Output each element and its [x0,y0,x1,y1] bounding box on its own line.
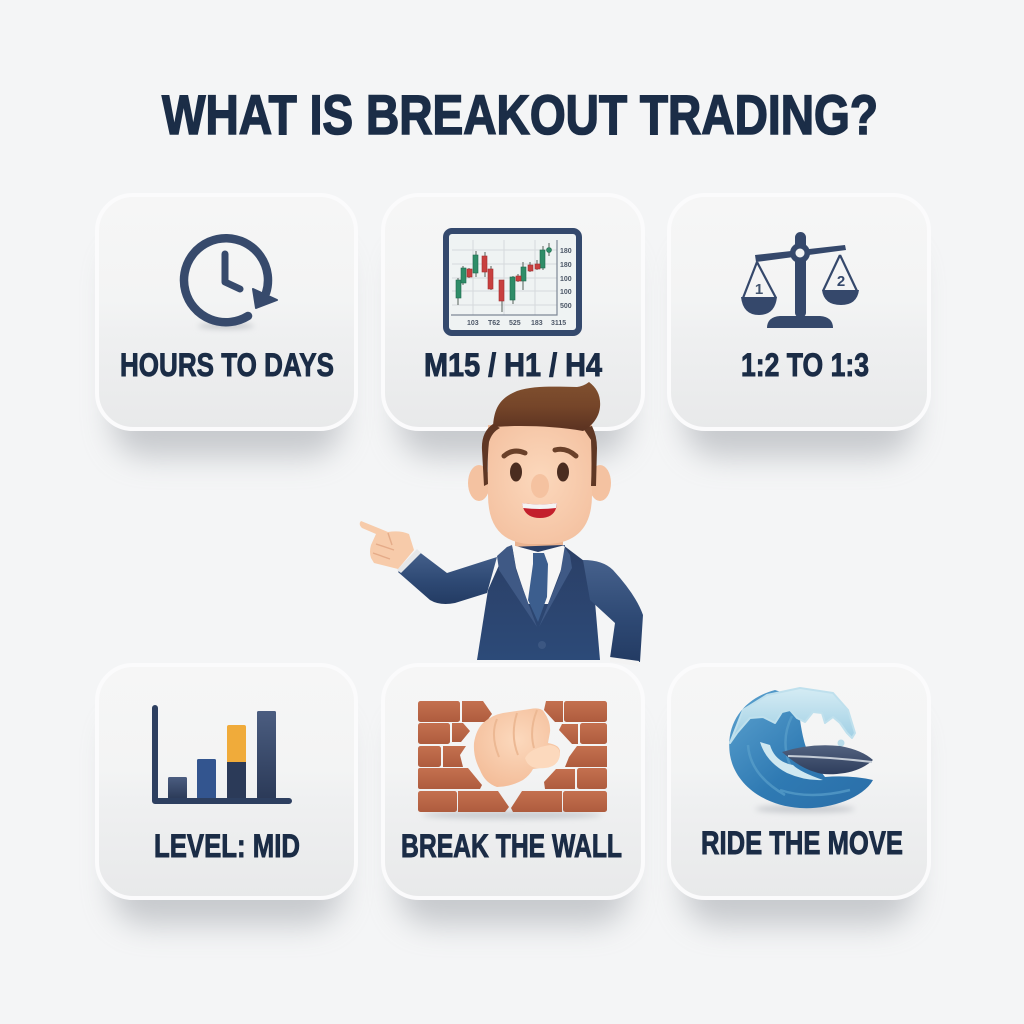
icon: clock with arrow [184,238,277,329]
hair top [493,382,600,431]
icon: candlestick chart monitor: 103 [467,320,479,327]
nose [531,474,549,498]
icon: balance scale [741,232,859,328]
eyebrows [504,449,576,456]
icon: bar chart [155,708,289,801]
label: break the wall: BREAK THE WALL [401,828,622,864]
shirt collar [512,545,565,604]
icon: candlestick chart monitor: 183 [531,320,543,327]
eyes [510,462,522,482]
tie [528,553,548,622]
neck [515,530,563,554]
pointing hand [360,521,414,569]
icon: candlestick chart monitor: 180 [560,262,572,269]
right cuff [610,657,639,666]
panel: level [97,665,356,925]
icon: candlestick chart monitor: 180 [560,248,572,255]
label: hours to days: HOURS TO DAYS [120,347,334,383]
icon: candlestick chart monitor [446,231,579,333]
icon: balance scale: 2 [837,273,845,290]
title: WHAT IS BREAKOUT TRADING? [162,83,878,146]
face [488,425,592,544]
ears [468,465,490,501]
icon: candlestick chart monitor: 3115 [551,320,566,327]
label: risk reward ratio: 1:2 TO 1:3 [741,347,869,383]
mouth [522,503,557,518]
panel: break the wall [383,665,643,925]
right sleeve [583,560,643,662]
panel: ride the move [669,665,929,925]
lapels [497,545,572,627]
teeth [522,503,557,509]
side hair [482,424,597,486]
icon: wave with surfboard [729,688,873,813]
icon: candlestick chart monitor: 525 [509,320,521,327]
character: pointing businessman [360,382,643,666]
label: ride the move: RIDE THE MOVE [701,825,903,861]
panel: risk reward [669,195,929,457]
left arm [398,551,497,604]
panel: holding time [97,195,356,457]
panel: timeframes [383,195,643,457]
icon: candlestick chart monitor: T62 [488,320,500,327]
jacket body [477,545,600,660]
icon: candlestick chart monitor: 100 [560,289,572,296]
icon: candlestick chart monitor: 500 [560,303,572,310]
icon: balance scale: 1 [755,281,763,298]
label: level: LEVEL: MID [154,828,300,864]
jacket button [538,641,546,649]
icon: candlestick chart monitor: 100 [560,276,572,283]
icon: fist through brick wall [418,701,607,819]
label: timeframes: M15 / H1 / H4 [424,347,602,383]
left cuff [397,549,421,573]
